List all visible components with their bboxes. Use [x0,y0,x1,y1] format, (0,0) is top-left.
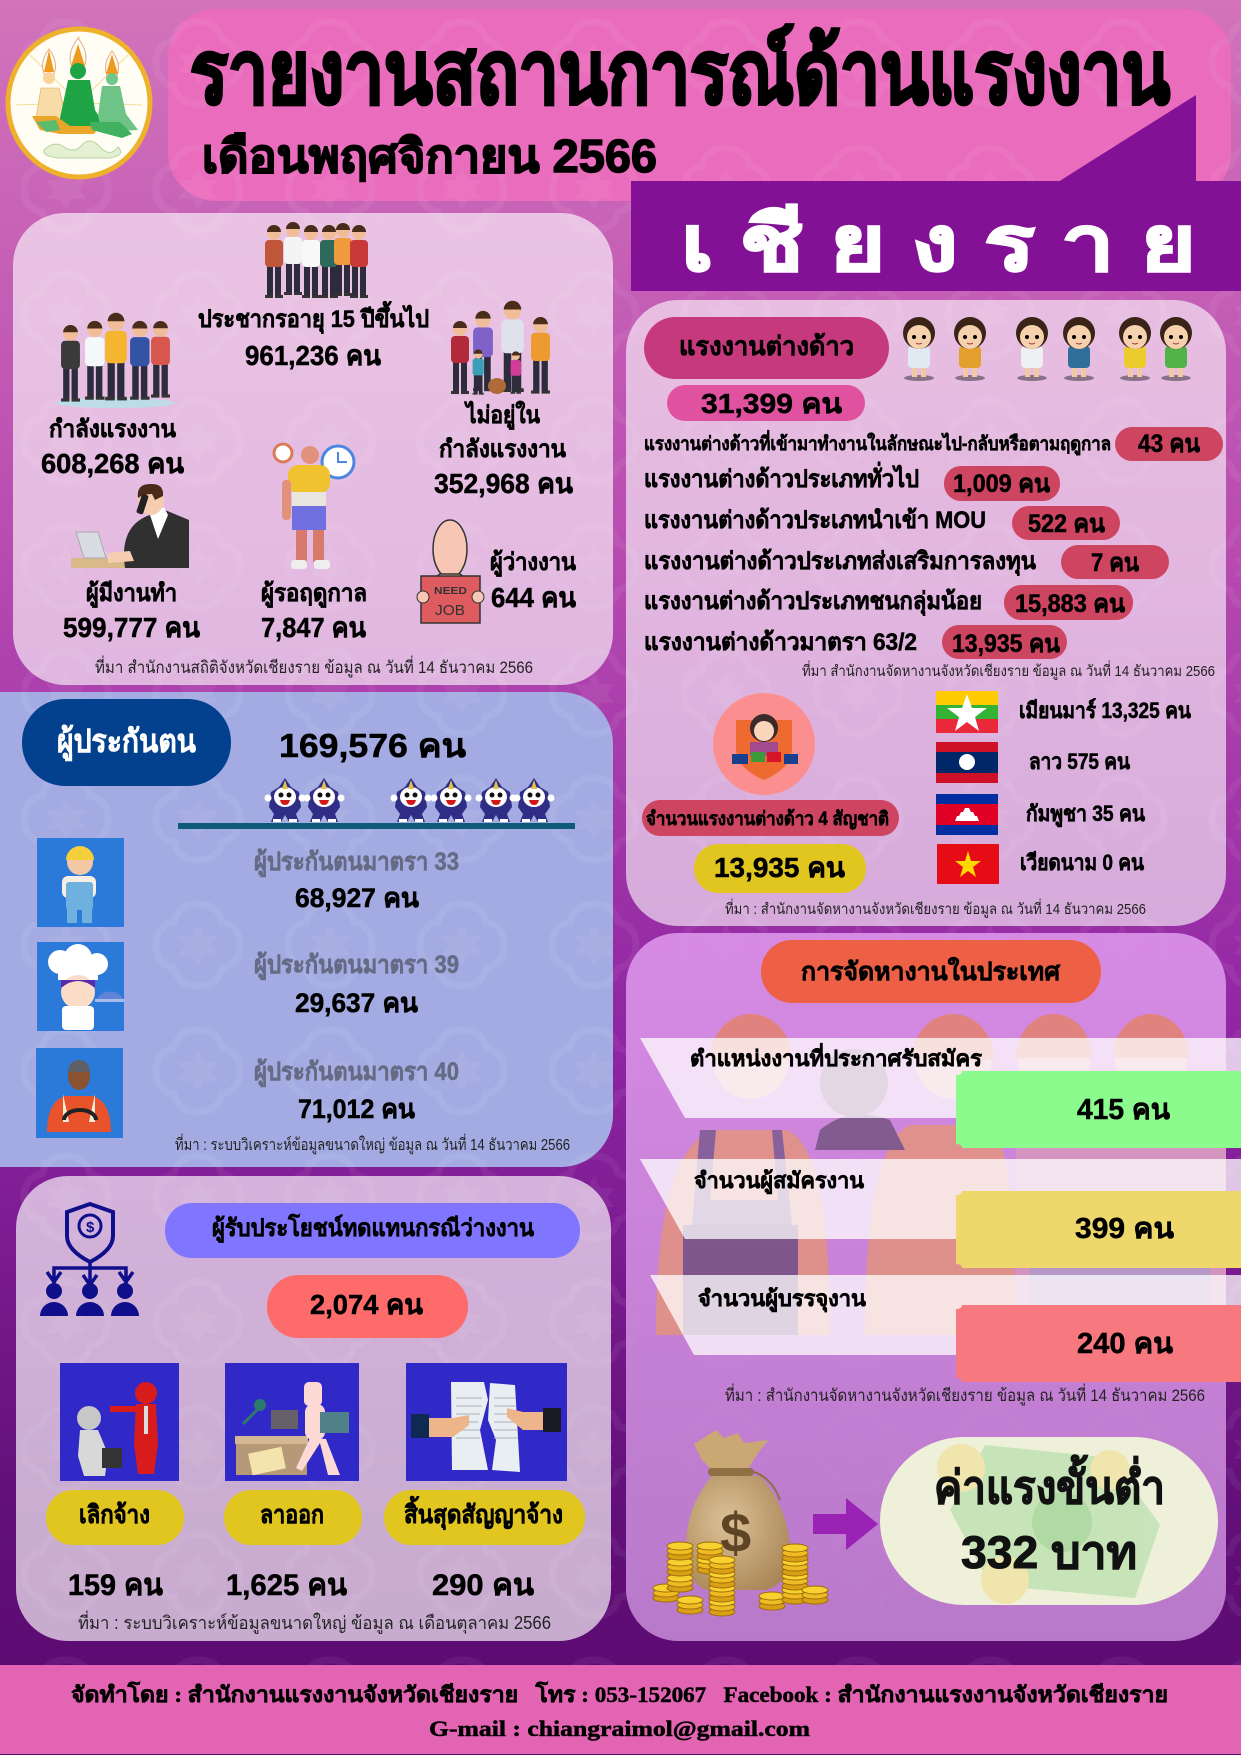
icon: benefit shield and people [40,1204,139,1316]
row: MOU: 522 คน [1028,510,1105,538]
pill: dismissed: เลิกจ้าง [79,1501,150,1529]
heading pill: ผู้ประกันตน [57,723,196,762]
text: employed: ผู้มีงานทำ [86,580,177,608]
label: Vietnam: เวียดนาม 0 คน [1020,850,1144,875]
pill: nationalities total: 13,935 คน [714,852,845,883]
pill: resigned [224,1490,362,1545]
heading pill [761,940,1101,1003]
strip: applicants [640,1159,1241,1268]
pill: dismissed [46,1490,184,1545]
province banner: เ ชี ย ง ร า ย [681,202,1196,287]
strip: applicants: จำนวนผู้สมัครงาน [694,1168,864,1195]
row: ethnic minority: 15,883 คน [1015,590,1125,618]
heading pill [22,699,231,786]
icon: benefit shield and people: $ [86,1219,95,1236]
heading pill: ผู้รับประโยชน์ทดแทนกรณีว่างงาน [212,1213,535,1243]
source note: ที่มา : ระบบวิเคราะห์ข้อมูลขนาดใหญ่ ข้อมูล ณ เดือนตุลาคม 2566 [78,1610,551,1634]
divider bar [178,823,575,829]
row: ethnic minority: แรงงานต่างด้าวประเภทชนกลุ่มน้อย [644,588,982,617]
flag: Laos [936,742,998,783]
label: Myanmar: เมียนมาร์ 13,325 คน [1019,698,1191,723]
icon: need job sign: NEED [434,586,467,597]
icon: SSO mascots [264,778,554,822]
source note: ที่มา : ระบบวิเคราะห์ข้อมูลขนาดใหญ่ ข้อมูล ณ วันที่ 14 ธันวาคม 2566 [175,1133,570,1155]
flag: Vietnam [937,844,999,884]
strip: vacancies: ตำแหน่งงานที่ประกาศรับสมัคร [690,1042,982,1071]
callout: minimum wage: 332 บาท [961,1527,1137,1578]
image: torn contract [406,1363,567,1481]
icon: workers [55,313,175,408]
number: population: 961,236 คน [245,340,381,371]
row: investment: 7 คน [1091,549,1139,577]
strip: vacancies [640,1038,1241,1148]
text: section 33: ผู้ประกันตนมาตรา 33 [254,848,459,878]
icon: population group [265,222,368,298]
heading pill [165,1203,580,1258]
number: section 33: 68,927 คน [295,883,420,913]
number: not in labour force: 352,968 คน [434,468,573,499]
text: labour force line 2: กำลังแรงงาน [439,436,567,463]
icon: need job sign [417,520,484,623]
pill: four nationalities [642,800,899,836]
row: seasonal border workers: แรงงานต่างด้าวที่เข้ามาทำงานในลักษณะไป-กลับหรือตามฤดูกาล [644,430,1111,456]
row: section 63/2 [644,625,1067,659]
row: MOU [644,506,1120,540]
text: population 15+: ประชากรอายุ 15 ปีขึ้นไป [198,300,429,335]
panel: domestic job placement [626,933,1241,1641]
row: general: 1,009 คน [953,470,1050,498]
text: seasonal: ผู้รอฤดูกาล [261,580,367,608]
background workers illustration [656,1014,1226,1335]
strip: vacancies: 415 คน [1077,1094,1170,1126]
icon: need job sign: JOB [435,602,465,619]
pill: four nationalities: จำนวนแรงงานต่างด้าว 4 สัญชาติ [646,808,889,830]
total pill [667,385,865,421]
arrow [813,1498,878,1550]
panel: labour force [13,213,613,685]
row: general: แรงงานต่างด้าวประเภททั่วไป [644,461,919,493]
text: section 39: ผู้ประกันตนมาตรา 39 [254,951,459,981]
text: unemployed: ผู้ว่างงาน [490,549,577,577]
strip: placements [650,1275,1241,1382]
row: section 63/2: แรงงานต่างด้าวมาตรา 63/2 [644,629,917,656]
total pill: 31,399 คน [701,388,842,419]
number: section 40: 71,012 คน [298,1094,415,1124]
number: resigned: 1,625 คน [226,1569,347,1602]
label: Cambodia: กัมพูชา 35 คน [1026,801,1145,828]
logo: provincial seal [8,29,150,177]
callout: minimum wage: ค่าแรงขั้นต่ำ [934,1454,1165,1513]
row: seasonal border workers [644,427,1223,461]
image: resignation [225,1363,359,1481]
total pill [267,1275,468,1338]
row: general [644,461,1060,501]
number: unemployed: 644 คน [491,582,576,613]
icon: labourer section 33 [37,838,124,927]
subtitle: month: เดือนพฤศจิกายน 2566 [202,130,657,182]
icon: driver section 40 [36,1048,123,1138]
heading pill: แรงงานต่างด้าว [679,331,854,361]
text: not in labour force: ไม่อยู่ใน [463,400,541,430]
icon: waiting man with clocks [274,444,354,569]
callout: minimum wage [880,1437,1218,1605]
icon: family [451,301,550,395]
flag: Cambodia [936,794,998,835]
row: MOU: แรงงานต่างด้าวประเภทนำเข้า MOU [644,507,986,534]
panel: unemployment benefits [16,1176,611,1641]
strip: placements: จำนวนผู้บรรจุงาน [698,1286,866,1313]
number: section 39: 29,637 คน [295,988,419,1018]
footer [0,1665,1241,1754]
icon: four nationalities badge [713,693,815,795]
icon: workers in national dress [903,317,1192,381]
pill: nationalities total [694,844,866,893]
icon: chef section 39 [37,942,124,1031]
text: section 40: ผู้ประกันตนมาตรา 40 [254,1058,459,1088]
row: investment [644,545,1169,579]
number: insured total: 169,576 คน [279,727,466,764]
number: labour force: 608,268 คน [41,448,184,479]
icon: employed businessman [71,484,189,568]
row: seasonal border workers: 43 คน [1138,430,1200,458]
heading pill: การจัดหางานในประเทศ [801,956,1061,986]
number: contract ended: 290 คน [432,1569,535,1602]
row: ethnic minority [644,585,1133,620]
row: investment: แรงงานต่างด้าวประเภทส่งเสริมการลงทุน [644,548,1037,577]
number: employed: 599,777 คน [63,612,200,643]
icon: money bag and coins: $ [720,1501,751,1564]
text: labour force: กำลังแรงงาน [49,416,177,443]
heading pill [644,317,889,379]
panel: insured persons [0,692,613,1167]
number: seasonal: 7,847 คน [261,612,366,643]
flag: Myanmar [936,691,998,733]
icon: money bag and coins [653,1430,828,1616]
footer: G-mail : chiangraimol@gmail.com [429,1716,810,1741]
strip: applicants: 399 คน [1075,1213,1174,1245]
strip: placements: 240 คน [1077,1328,1173,1360]
pill: resigned: ลาออก [260,1501,324,1529]
image: dismissed employee [60,1363,179,1481]
footer: จัดทำโดย : สำนักงานแรงงานจังหวัดเชียงราย โทร : 053-152067 Facebook : สำนักงานแรงงานจังหวัดเชียงราย [71,1681,1168,1707]
number: dismissed: 159 คน [68,1569,163,1602]
pill: contract ended: สิ้นสุดสัญญาจ้าง [404,1495,563,1531]
panel: foreign workers [626,300,1226,926]
header banner [168,9,1231,201]
row: section 63/2: 13,935 คน [952,630,1060,658]
pill: contract ended [384,1490,585,1545]
total pill: 2,074 คน [310,1289,423,1320]
source note: ที่มา สำนักงานสถิติจังหวัดเชียงราย ข้อมูล ณ วันที่ 14 ธันวาคม 2566 [95,655,533,678]
province banner [631,95,1241,291]
source note: ที่มา : สำนักงานจัดหางานจังหวัดเชียงราย ข้อมูล ณ วันที่ 14 ธันวาคม 2566 [725,898,1146,918]
label: Laos: ลาว 575 คน [1029,749,1130,774]
